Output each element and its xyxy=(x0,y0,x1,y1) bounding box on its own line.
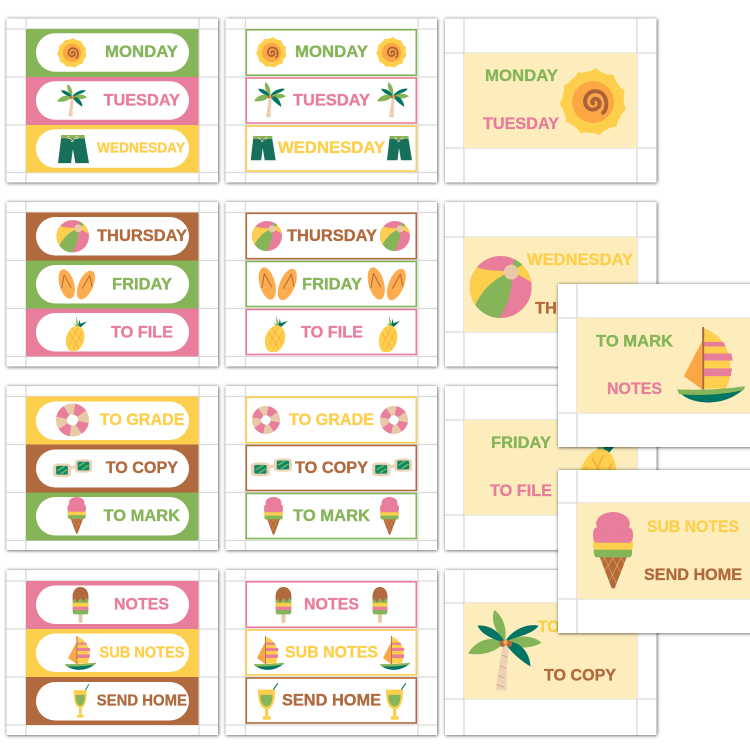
label: To File outlined xyxy=(246,310,416,358)
label: To Copy: TO COPY xyxy=(106,458,179,477)
label: To Grade outlined: TO GRADE xyxy=(289,410,374,429)
text: To Grade: TO GRADE xyxy=(538,617,623,636)
cream panel xyxy=(464,53,637,148)
text: To Copy: TO COPY xyxy=(544,666,617,685)
sheet: Monday and Tuesday cream cards xyxy=(445,18,656,182)
label: To Grade outlined xyxy=(246,397,416,443)
label: Send Home xyxy=(26,677,198,725)
label: Send Home: SEND HOME xyxy=(97,693,187,710)
text: To File: TO FILE xyxy=(490,481,552,500)
label: Thursday outlined xyxy=(246,213,416,259)
label: Monday xyxy=(26,29,198,77)
sheet: Monday to Wednesday outlined labels xyxy=(226,18,437,182)
label: Send Home outlined xyxy=(246,678,416,723)
sheet: To Grade to To Mark outlined labels xyxy=(226,386,437,550)
cream panel xyxy=(577,318,750,413)
cream panel xyxy=(464,420,637,515)
label: Wednesday outlined xyxy=(246,126,416,171)
overlapping card: To Mark and Notes xyxy=(558,284,750,447)
label: Monday: MONDAY xyxy=(105,42,179,61)
sheet: Friday and To File cream cards xyxy=(445,386,656,550)
label: Thursday xyxy=(26,212,198,260)
text: Friday: FRIDAY xyxy=(491,433,552,452)
label: Notes outlined: NOTES xyxy=(304,595,359,614)
label: Sub Notes outlined: SUB NOTES xyxy=(285,643,378,662)
label: Sub Notes: SUB NOTES xyxy=(100,645,185,662)
label: Thursday outlined: THURSDAY xyxy=(287,226,378,245)
label: Friday xyxy=(26,260,198,308)
label: Sub Notes xyxy=(26,629,198,677)
cream panel xyxy=(577,503,750,599)
sheet: Notes to Send Home filled labels xyxy=(6,570,218,735)
label: To File xyxy=(26,308,198,357)
label: Tuesday outlined xyxy=(246,78,416,123)
text: Send Home: SEND HOME xyxy=(644,565,742,584)
label: To Mark xyxy=(26,492,198,540)
label: Notes: NOTES xyxy=(114,595,169,614)
sheet: To Grade to To Mark filled labels xyxy=(6,386,218,550)
text: To Mark: TO MARK xyxy=(596,332,674,351)
text: Sub Notes: SUB NOTES xyxy=(647,517,739,536)
cream panel xyxy=(464,603,637,699)
label: Tuesday outlined: TUESDAY xyxy=(293,90,371,110)
sheet: Thursday to To File outlined labels xyxy=(226,202,437,366)
icon: sailboat xyxy=(677,327,745,402)
sheet: Monday to Wednesday filled labels xyxy=(6,18,218,182)
label: Friday outlined: FRIDAY xyxy=(302,275,363,294)
label: To Grade: TO GRADE xyxy=(100,410,184,429)
label: To Copy outlined: TO COPY xyxy=(295,458,369,477)
label: Monday outlined: MONDAY xyxy=(295,42,369,61)
sheet: To Grade and To Copy cream cards xyxy=(445,570,656,735)
label: Notes outlined xyxy=(246,582,416,627)
icon: sun xyxy=(559,68,626,135)
label: Tuesday xyxy=(26,77,198,125)
label: To Mark outlined: TO MARK xyxy=(293,506,371,525)
icon: palm tree xyxy=(468,610,542,690)
icon: ice cream cone xyxy=(593,512,633,589)
label: Sub Notes outlined xyxy=(246,630,416,675)
label: To Copy xyxy=(26,444,198,492)
icon: pineapple xyxy=(572,426,622,526)
cream panel xyxy=(464,237,637,332)
label: To File: TO FILE xyxy=(111,323,173,342)
label: Tuesday: TUESDAY xyxy=(104,90,181,110)
label: To Copy outlined xyxy=(246,446,416,490)
label: Friday outlined xyxy=(246,262,416,306)
label: Monday outlined xyxy=(246,30,416,75)
label: Send Home outlined: SEND HOME xyxy=(282,691,381,710)
sheet: Wednesday and Thursday cream cards xyxy=(445,202,656,366)
text: Tuesday: TUESDAY xyxy=(483,114,560,133)
sheet: Notes to Send Home outlined labels xyxy=(226,570,437,735)
label: To File outlined: TO FILE xyxy=(301,323,363,342)
label: Wednesday outlined: WEDNESDAY xyxy=(278,138,386,157)
label: To Mark: TO MARK xyxy=(104,506,181,525)
label: Wednesday xyxy=(26,125,198,172)
icon: beach ball xyxy=(470,256,532,318)
label: Friday: FRIDAY xyxy=(112,275,173,294)
label: To Grade xyxy=(26,396,198,444)
label: To Mark outlined xyxy=(246,494,416,538)
text: Thursday: THURSDAY xyxy=(535,299,626,318)
overlapping card: Sub Notes and Send Home xyxy=(558,470,750,633)
text: Wednesday: WEDNESDAY xyxy=(527,250,634,269)
label: Wednesday: WEDNESDAY xyxy=(97,141,185,157)
label: Thursday: THURSDAY xyxy=(97,226,188,245)
sheet: Thursday to To File filled labels xyxy=(6,202,218,366)
label: Notes xyxy=(26,581,198,629)
text: Notes: NOTES xyxy=(607,379,662,398)
text: Monday: MONDAY xyxy=(485,66,559,85)
